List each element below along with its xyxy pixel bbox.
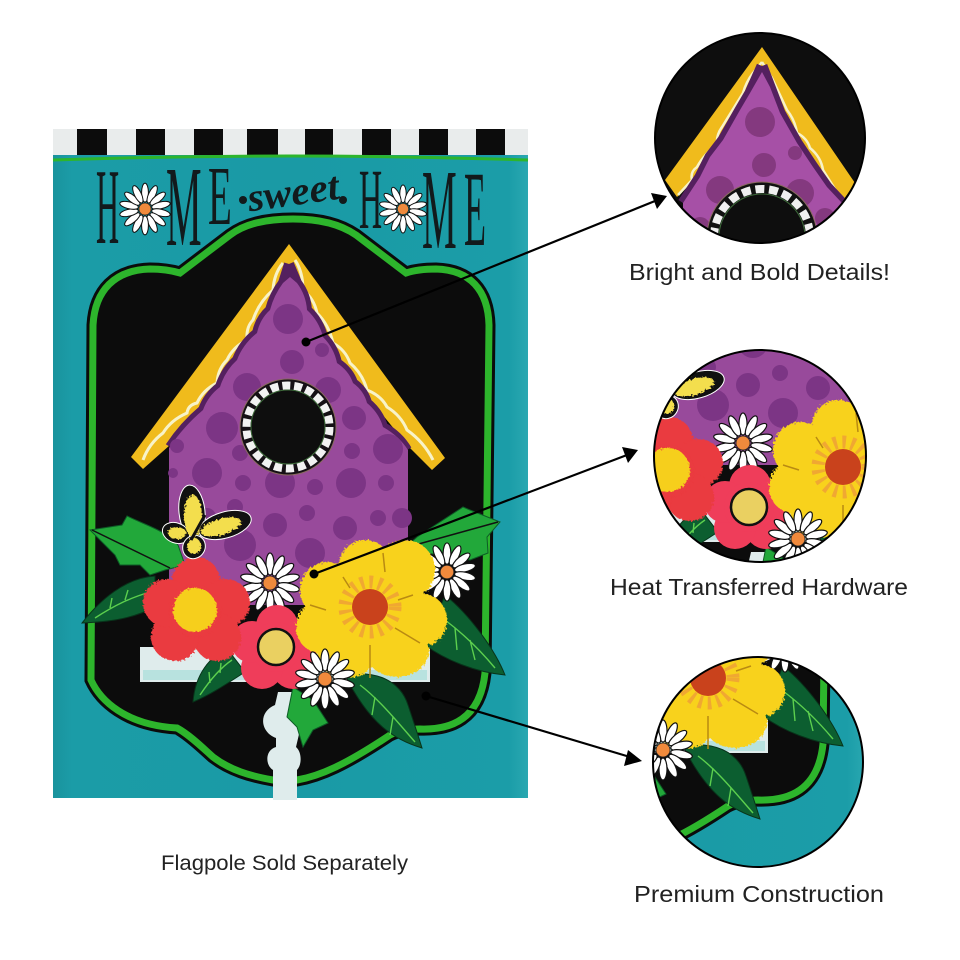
callout circle: bright details: [654, 32, 866, 244]
title: Home Sweet Home: E: [464, 151, 486, 269]
arrow: premium construction: [422, 692, 642, 766]
caption: flagpole sold separately: Flagpole Sold Separately: [161, 852, 409, 875]
icon: title daisy left: [119, 183, 171, 235]
title: Home Sweet Home: E: [208, 151, 232, 243]
label: heat transferred hardware: Heat Transferred Hardware: [610, 574, 908, 600]
callout circle: heat transferred hardware: [653, 349, 867, 563]
icon: title daisy right: [379, 185, 427, 233]
title: Home Sweet Home: M: [422, 146, 457, 273]
label: premium construction: Premium Construction: [634, 881, 884, 907]
checkered top sleeve: [53, 129, 528, 159]
flag: [53, 129, 528, 800]
label: bright details: Bright and Bold Details!: [629, 259, 890, 285]
title: Home Sweet Home: H: [359, 151, 382, 247]
title: Home Sweet Home: [96, 144, 486, 273]
green sleeve seam: [53, 156, 528, 160]
arrow: bright details: [302, 193, 667, 346]
title: Home Sweet Home: H: [96, 148, 119, 267]
callout circle: premium construction: [652, 656, 864, 868]
flag artwork: panel, birdhouse and flowers: [53, 155, 528, 800]
title: Home Sweet Home: sweet: [243, 163, 344, 220]
title: Home Sweet Home: M: [166, 144, 202, 270]
arrow: heat transferred hardware: [310, 447, 638, 578]
